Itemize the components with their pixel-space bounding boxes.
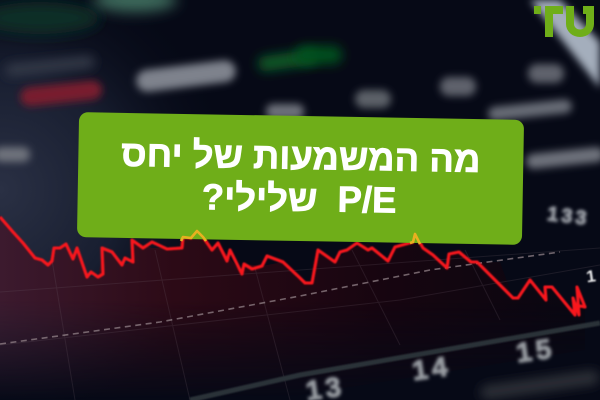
axis label 14: 14 [410, 350, 453, 386]
red price line [0, 217, 585, 315]
blurred top green glow [0, 2, 100, 34]
dashed reference line [0, 252, 560, 344]
blurred faint grey band [5, 55, 95, 77]
logo TU [534, 6, 594, 37]
blurred small label left [0, 147, 30, 162]
blurred green label right [296, 46, 342, 64]
blurred green label left [257, 49, 319, 72]
blurred red label [19, 80, 103, 107]
red area under line [0, 216, 512, 382]
blurred labels right [355, 90, 391, 108]
axis number 133: 133 [546, 203, 591, 230]
blurred label near panel [266, 104, 304, 119]
diagonal light streak [530, 0, 600, 88]
title text [121, 133, 481, 221]
grid lines [0, 248, 600, 400]
faint blurred labels bottom right [479, 370, 600, 400]
title text: מה המשמעות של יחס [121, 133, 481, 180]
axis number 1: 1 [585, 266, 597, 286]
left haze [0, 0, 300, 400]
title text: P/E שלילי? [202, 176, 397, 221]
time axis bar [190, 323, 600, 400]
green title panel [77, 112, 524, 245]
axis label 15: 15 [514, 332, 557, 368]
blurred grey label [135, 59, 237, 93]
